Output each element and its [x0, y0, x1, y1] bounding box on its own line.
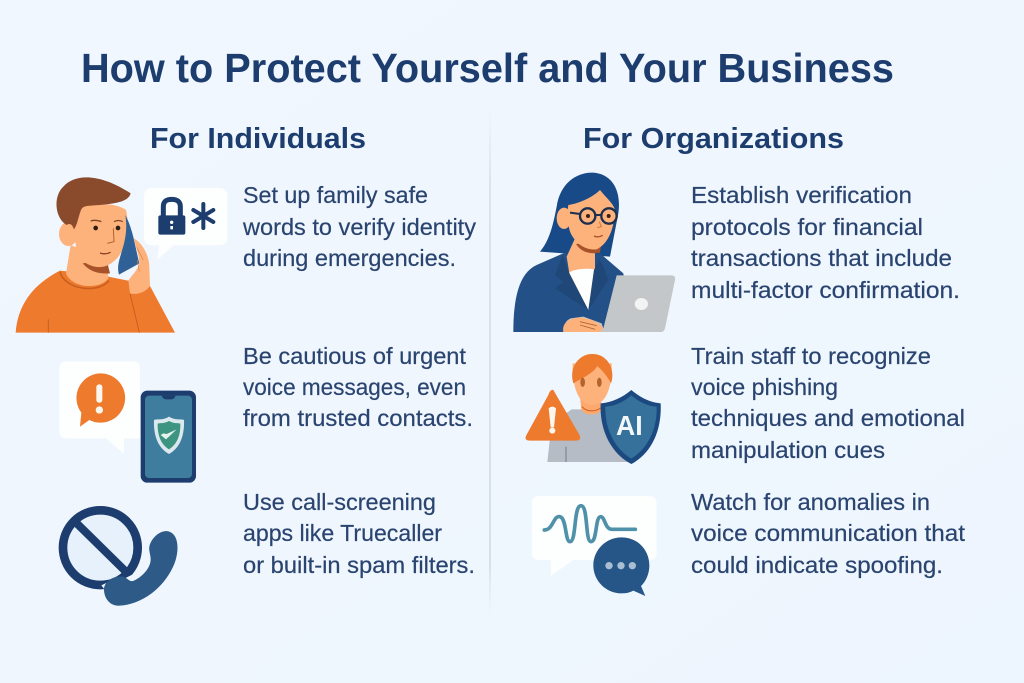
- text: staff training: Train staff to recognize: [691, 343, 931, 369]
- text: verification protocols: Establish verification: [691, 182, 912, 208]
- text: family safe words: Set up family safe: [243, 182, 428, 208]
- text: family safe words: during emergencies.: [243, 245, 456, 271]
- heading: for organizations: For Organizations: [583, 123, 844, 155]
- text: urgent voice messages: voice messages, even: [243, 374, 466, 400]
- icon: staff member with warning and AI shield: [526, 354, 661, 464]
- icon: voice waveform with chat bubble: [532, 496, 657, 596]
- icon: staff member with warning and AI shield: AI: [616, 410, 643, 441]
- text: voice anomalies: could indicate spoofing.: [691, 552, 943, 578]
- text: verification protocols: transactions that include: [691, 245, 952, 271]
- text: family safe words: words to verify identity: [242, 214, 477, 240]
- text: family safe words: [242, 182, 477, 271]
- text: verification protocols: [691, 182, 960, 303]
- icon: woman at laptop: [513, 173, 675, 332]
- panel: for organizations: [513, 123, 966, 596]
- icon: man on phone with lock speech bubble: [16, 177, 227, 333]
- text: staff training: techniques and emotional: [691, 405, 965, 431]
- text: voice anomalies: Watch for anomalies in: [691, 489, 930, 515]
- text: verification protocols: protocols for financial: [691, 214, 923, 240]
- text: staff training: [691, 343, 965, 463]
- text: call screening apps: or built-in spam filters.: [243, 552, 475, 578]
- text: staff training: voice phishing: [691, 374, 838, 400]
- text: urgent voice messages: [243, 343, 473, 431]
- icon: blocked phone call: [63, 510, 178, 606]
- text: voice anomalies: [691, 489, 966, 578]
- heading: for individuals: For Individuals: [150, 123, 366, 155]
- title: How to Protect Yourself and Your Business: [81, 45, 894, 91]
- text: verification protocols: multi-factor confirmation.: [691, 277, 960, 303]
- text: urgent voice messages: from trusted contacts.: [243, 405, 473, 431]
- text: staff training: manipulation cues: [691, 437, 885, 463]
- text: call screening apps: apps like Truecaller: [243, 520, 442, 546]
- text: urgent voice messages: Be cautious of urgent: [243, 343, 467, 369]
- icon: alert bubble and shielded phone: [59, 361, 196, 483]
- panel: for individuals: [16, 123, 477, 606]
- text: call screening apps: Use call-screening: [243, 489, 436, 515]
- text: call screening apps: [243, 489, 475, 578]
- text: voice anomalies: voice communication that: [691, 520, 966, 546]
